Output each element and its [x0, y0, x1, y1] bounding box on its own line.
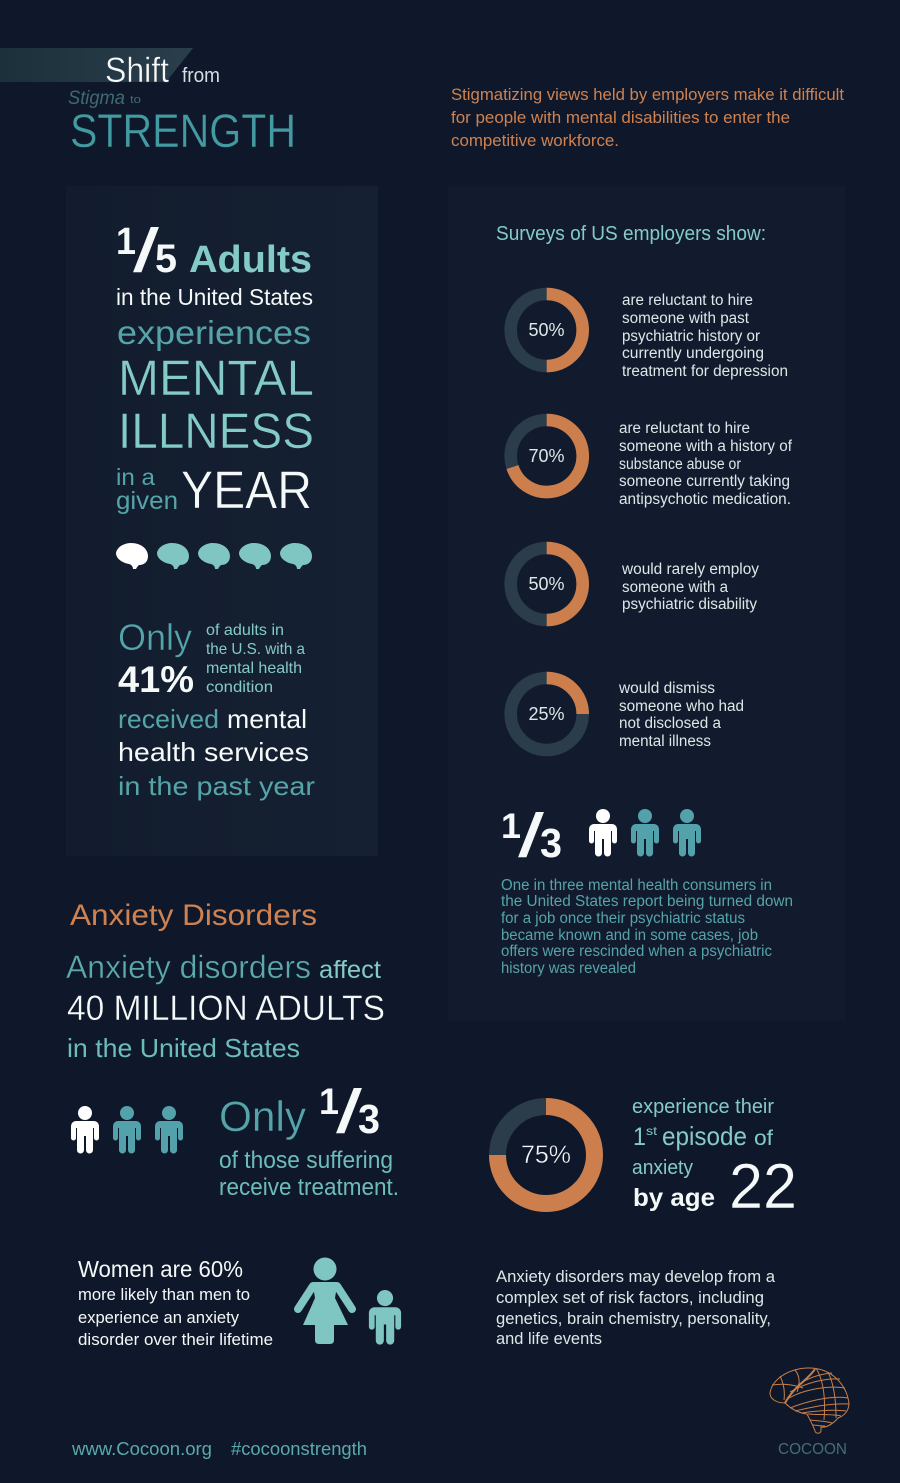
title: Stigma: Stigma	[68, 88, 125, 109]
donut 50% second	[511, 548, 583, 620]
text: turned down for a job: for a job once their psychiatric status	[501, 910, 745, 927]
first episode by age 22	[632, 1096, 797, 1222]
text: would dismiss: not disclosed a	[619, 715, 721, 732]
41%: 41%	[118, 659, 194, 700]
fraction 1/5	[116, 217, 177, 284]
people icons: one in three	[589, 809, 701, 856]
text: rarely employ: someone with a	[622, 579, 728, 596]
women statistic text	[78, 1256, 273, 1349]
first episode by age 22: of	[754, 1127, 773, 1150]
brain icons row	[116, 543, 312, 569]
received mental health services: health services	[118, 737, 309, 767]
in a: in a	[116, 464, 155, 490]
text: reluctant, substance abuse: someone with a history of	[619, 438, 793, 455]
women statistic text: disorder over their lifetime	[78, 1330, 273, 1349]
text: rarely employ	[621, 561, 759, 613]
text: turned down for a job: the United States report being turned down	[501, 893, 793, 910]
text: turned down for a job: One in three mental health consumers in	[501, 877, 772, 894]
text: reluctant, substance abuse: substance abuse or	[619, 456, 741, 473]
text: reluctant, substance abuse: are reluctant to hire	[619, 420, 750, 437]
only one third receive treatment: receive treatment.	[219, 1174, 399, 1201]
fraction 1/3	[501, 802, 562, 869]
donut 50%	[511, 294, 583, 366]
text: rarely employ: would rarely employ	[621, 561, 759, 578]
in the United States: in the United States	[116, 284, 313, 310]
donut 70%: 70%	[528, 446, 565, 466]
YEAR: YEAR	[181, 461, 312, 520]
donut 75%: 75%	[521, 1141, 571, 1169]
ILLNESS: ILLNESS	[118, 403, 314, 459]
title: STRENGTH: STRENGTH	[70, 104, 296, 157]
title: Shift: Shift	[105, 51, 169, 90]
only one third receive treatment: Only	[219, 1093, 306, 1141]
intro text: competitive workforce.	[451, 131, 619, 150]
anxiety statistic text: 40 MILLION ADULTS	[67, 989, 385, 1028]
text: would dismiss: mental illness	[619, 733, 711, 750]
received mental health services	[118, 704, 315, 801]
logo wordmark: COCOON	[778, 1441, 847, 1458]
text: reluctant, depression: are reluctant to hire	[622, 292, 753, 309]
people icons: one in three receive treatment	[71, 1106, 183, 1154]
fraction 1/5: 1	[116, 221, 136, 263]
first episode by age 22: anxiety	[632, 1157, 693, 1179]
anxiety statistic text	[66, 949, 385, 1063]
experiences: experiences	[117, 314, 311, 351]
risk factors text: complex set of risk factors, including	[496, 1289, 764, 1307]
anxiety statistic text: in the United States	[67, 1033, 300, 1063]
surveys heading: Surveys of US employers show:	[496, 223, 766, 245]
panel: adults with mental illness	[66, 186, 378, 856]
of adults note: condition	[206, 679, 273, 696]
fraction 1/3: /	[519, 802, 543, 869]
Only: Only	[118, 617, 192, 658]
Adults: Adults	[189, 239, 312, 281]
text: turned down for a job: history was revealed	[501, 960, 636, 977]
given: given	[116, 487, 178, 515]
only one third receive treatment	[219, 1078, 399, 1201]
received mental health services: in the past year	[118, 771, 315, 801]
of adults note: of adults in	[206, 622, 284, 639]
intro text: Stigmatizing views held by employers make it difficult	[451, 85, 844, 104]
text: reluctant, substance abuse	[619, 420, 793, 508]
text: would dismiss: someone who had	[619, 698, 744, 715]
received mental health services: received	[118, 704, 219, 734]
title: to: to	[130, 94, 141, 106]
intro text	[451, 85, 844, 150]
title ribbon	[0, 48, 193, 82]
text: reluctant, depression: currently undergoing	[622, 345, 764, 362]
fraction 1/3: 1	[501, 807, 521, 846]
women statistic text: Women are 60%	[78, 1256, 243, 1282]
women statistic text: experience an anxiety	[78, 1308, 239, 1327]
first episode by age 22: 1	[633, 1123, 646, 1151]
footer links	[71, 1439, 367, 1459]
donut 70%	[511, 420, 583, 492]
only one third receive treatment: 1	[319, 1081, 339, 1122]
of adults note: mental health	[206, 660, 302, 677]
first episode by age 22: experience their	[632, 1096, 774, 1118]
only one third receive treatment: 3	[358, 1096, 380, 1142]
only one third receive treatment: of those suffering	[219, 1147, 393, 1174]
risk factors text	[496, 1268, 776, 1348]
of adults note: the U.S. with a	[206, 641, 305, 658]
donut 50%: 50%	[528, 320, 565, 340]
text: would dismiss: would dismiss	[618, 680, 715, 697]
text: reluctant, depression: psychiatric history or	[622, 328, 760, 345]
only one third receive treatment: /	[337, 1078, 361, 1145]
donut 25%	[511, 678, 583, 750]
donut 75%	[498, 1106, 594, 1204]
women statistic text: more likely than men to	[78, 1285, 250, 1304]
received mental health services: mental	[227, 704, 307, 734]
risk factors text: Anxiety disorders may develop from a	[496, 1268, 776, 1286]
text: turned down for a job: became known and in some cases, job	[501, 927, 758, 944]
text: rarely employ: psychiatric disability	[622, 596, 757, 613]
first episode by age 22: by age	[633, 1184, 715, 1212]
text: would dismiss	[618, 680, 744, 750]
text: turned down for a job	[501, 877, 793, 977]
anxiety statistic text: Anxiety disorders	[66, 949, 311, 985]
risk factors text: and life events	[496, 1330, 602, 1348]
fraction 1/5: 5	[155, 237, 177, 281]
text: reluctant, depression: treatment for depression	[622, 363, 788, 380]
fraction 1/5: /	[134, 217, 158, 284]
donut 25%: 25%	[528, 704, 565, 724]
first episode by age 22: 22	[729, 1150, 797, 1222]
text: reluctant, depression	[622, 292, 788, 380]
text: reluctant, substance abuse: someone currently taking	[619, 473, 790, 490]
footer links: www.Cocoon.org	[71, 1439, 212, 1459]
MENTAL: MENTAL	[118, 350, 314, 406]
panel: employer surveys	[448, 186, 845, 1021]
footer links: #cocoonstrength	[231, 1439, 367, 1459]
intro text: for people with mental disabilities to enter the	[451, 108, 790, 127]
icon: Cocoon brain logo	[770, 1368, 849, 1433]
heading: Anxiety Disorders: Anxiety Disorders	[70, 899, 317, 932]
anxiety statistic text: affect	[319, 956, 381, 984]
text: reluctant, substance abuse: antipsychotic medication.	[619, 491, 791, 508]
first episode by age 22: episode	[662, 1121, 747, 1151]
first episode by age 22: st	[646, 1124, 658, 1138]
of adults note	[206, 622, 305, 696]
title: from: from	[182, 65, 220, 87]
title block	[0, 48, 296, 157]
risk factors text: genetics, brain chemistry, personality,	[496, 1310, 771, 1328]
donut 50% second: 50%	[528, 574, 565, 594]
fraction 1/3: 3	[540, 820, 562, 866]
icon: woman and man	[298, 1258, 401, 1345]
text: reluctant, depression: someone with past	[622, 310, 750, 327]
text: turned down for a job: offers were rescinded when a psychiatric	[501, 943, 772, 960]
